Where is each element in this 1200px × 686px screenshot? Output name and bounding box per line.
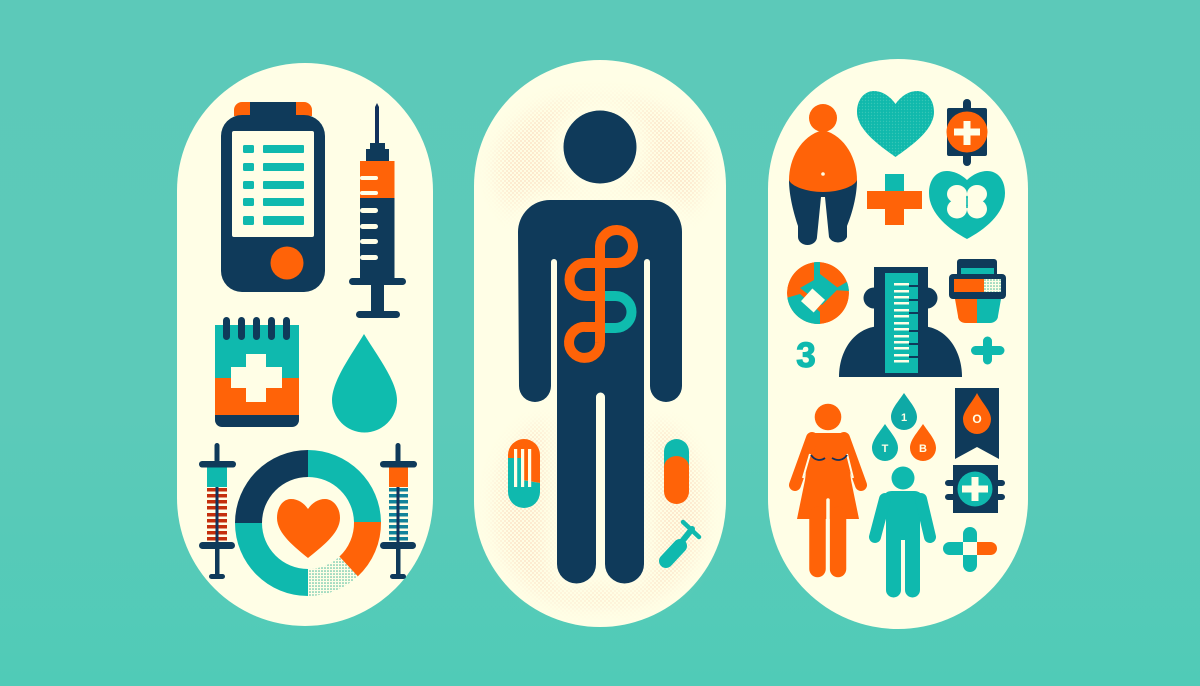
icon: two-tone cross bbox=[867, 174, 922, 225]
icon: teal heart bbox=[857, 91, 934, 157]
icon: blood drops: T bbox=[882, 443, 889, 455]
centre panel shape bbox=[474, 60, 726, 627]
icon: left capsule bbox=[508, 439, 540, 508]
icon: lifebuoy bbox=[786, 260, 850, 326]
icon: medical notebook bbox=[215, 317, 299, 427]
left panel shape bbox=[177, 63, 433, 626]
icon: right capsule bbox=[664, 439, 689, 504]
right panel shape bbox=[768, 59, 1028, 629]
icon: plus badge bbox=[946, 99, 988, 166]
icon: large syringe bbox=[349, 103, 406, 318]
panel: right bbox=[768, 59, 1028, 629]
panel: centre bbox=[474, 60, 726, 627]
icon: small syringe left bbox=[199, 443, 236, 579]
icon: heart bbox=[277, 499, 340, 558]
icon: blood drops: 1 bbox=[901, 412, 907, 424]
dotted halo bbox=[489, 94, 711, 612]
icon: water drop bbox=[332, 334, 397, 432]
icon: ribbon banner: O bbox=[972, 412, 982, 426]
number three: 3 bbox=[796, 336, 816, 375]
human figure bbox=[518, 97, 682, 584]
icon: ribbon banner bbox=[955, 388, 999, 459]
icon: overweight person bbox=[789, 104, 857, 245]
icon: small syringe right bbox=[380, 443, 417, 579]
symbol: looped organ bbox=[569, 230, 633, 358]
icon: heart with butterfly bbox=[929, 171, 1005, 239]
icon: ruler tower bbox=[839, 267, 962, 377]
donut chart with heart bbox=[235, 450, 381, 596]
icon: cup device bbox=[949, 259, 1006, 323]
panel: left bbox=[177, 63, 433, 626]
icon: multi-colour plus bbox=[943, 527, 997, 572]
icon: blood drops: B bbox=[919, 443, 927, 455]
icon: blood drops bbox=[872, 393, 936, 461]
icon: woman bbox=[795, 404, 861, 575]
icon: man bbox=[875, 466, 930, 598]
icon: plus chip bbox=[948, 465, 1002, 513]
icon: small plunger tool bbox=[666, 522, 699, 561]
icon: teal plus bbox=[976, 341, 1000, 360]
icon: phone checklist bbox=[221, 102, 325, 292]
